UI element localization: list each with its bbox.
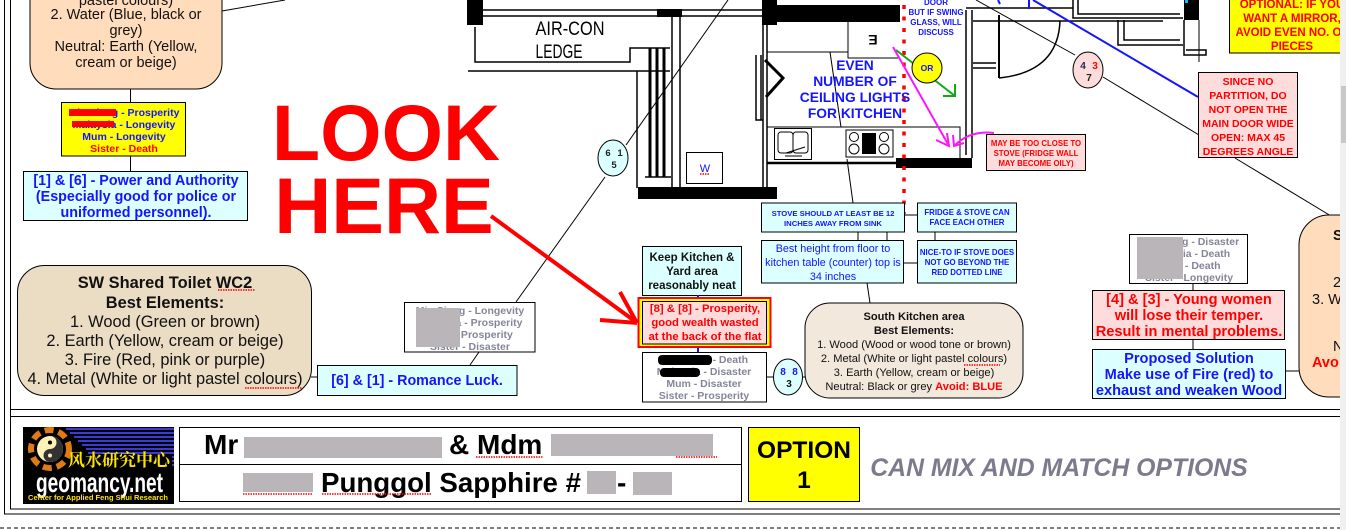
panel: best height: Best height from floor to [776,243,890,255]
panel: family yellow box [62,102,186,156]
title: client names: & Mdm [449,429,542,460]
panel: power and authority: (Especially good for police or [36,189,237,205]
title: client names: - [617,467,626,498]
panel: family gray box left: Malaysia - Prosperity [417,317,523,329]
panel: romance luck: [6] & [1] - Romance Luck. [331,373,503,389]
panel: right peach elements: S [1333,228,1343,244]
main door and right walls [966,0,1206,158]
panel: family gray box left: Min Siang - Longevity [416,305,524,317]
panel: best height [762,240,904,283]
callout: optional mirror: PIECES [1271,41,1313,53]
panel: nice-to: NICE-TO IF STOVE DOES [920,248,1014,257]
washing machine box [686,152,722,184]
panel: stove distance [762,203,904,232]
panel: right peach elements: N [1333,339,1343,355]
panel: proposed solution [1092,350,1286,399]
callout: optional mirror: AVOID EVEN NO. OF [1236,27,1346,39]
panel: right peach elements: 3. W [1312,292,1342,308]
callout: since no partition: OPEN: MAX 45 [1211,132,1285,144]
text: door swing note: GLASS, WILL [910,18,962,27]
panel: keep kitchen neat: Keep Kitchen & [650,252,734,264]
panel: young women warning: [4] & [3] - Young women [1106,292,1272,308]
circle: stars 4 3 7: 4 [1080,61,1086,72]
panel: young women warning: Result in mental problems. [1096,324,1282,340]
panel: stove distance: INCHES AWAY FROM SINK [784,219,882,228]
panel: family gray box right: Sister - Longevity [1145,272,1233,284]
icon: bagua [31,430,69,468]
panel: top peach elements: Neutral: Earth (Yellow, [55,39,197,55]
text: even number of ceiling lights: EVEN [836,58,874,73]
panel: right peach elements [1299,215,1346,397]
panel: power and authority: [1] & [6] - Power and Authority [33,173,239,189]
scrollbar [1340,0,1346,530]
panel: south kitchen area: Best Elements: [874,325,954,337]
fridge label: E [868,32,878,48]
panel: romance luck [318,366,517,396]
callout: since no partition: NOT OPEN THE [1209,104,1287,116]
panel: sw shared toilet: 4. Metal (White or light pastel colours) [27,370,303,388]
callout: since no partition [1198,72,1298,158]
panel: south kitchen area: 2. Metal (White or light pastel colours) [821,353,1007,365]
circle: stars 6 1 5: 6 [605,148,611,159]
panel: power and authority: uniformed personnel). [61,205,211,221]
panel: right peach elements: Avo [1312,355,1339,371]
callout: since no partition: MAIN DOOR WIDE [1202,118,1294,130]
panel: top peach elements: cream or beige) [75,55,177,71]
panel: family gray box left: Sister - Disaster [430,341,510,353]
callout: may be too close: MAY BE TOO CLOSE TO [991,139,1081,148]
panel: nice-to [918,240,1016,283]
panel: sw shared toilet: 2. Earth (Yellow, cream or beige) [46,332,284,350]
logo: geomancy.net [23,427,174,504]
callout: since no partition: SINCE NO [1223,76,1273,88]
panel: fridge and stove: FRIDGE & STOVE CAN [924,208,1010,217]
callout: since no partition: DEGREES ANGLE [1203,146,1293,158]
panel: young women warning [1092,290,1284,340]
logo: geomancy.net: geomancy.net [36,467,163,498]
panel: family gray box right: Min Siang - Disaster [1139,236,1239,248]
panel: top peach elements: 2. Water (Blue, black or [51,7,202,23]
panel: south kitchen area: Neutral: Black or grey Avoid: BLUE [825,381,1003,393]
panel: south kitchen area [805,303,1023,398]
kitchen walls [756,0,972,187]
title: client names: Punggol Sapphire # [321,467,581,498]
icon: or circle: OR [921,63,933,73]
text: even number of ceiling lights: CEILING LIGHTS [800,90,910,105]
panel: proposed solution: Proposed Solution [1124,351,1254,367]
panel: prosperity highlighted [638,298,770,347]
panel: family gray box centre: Min Siang - Death [660,354,748,366]
floor plan [222,0,1331,365]
callout: since no partition: PARTITION, DO [1209,90,1287,102]
panel: prosperity highlighted: at the back of the flat [648,331,762,343]
panel: sw shared toilet: Best Elements: [106,294,224,312]
panel: keep kitchen neat: Yard area [666,266,718,278]
circle: stars 4 3 7: 3 [1092,61,1098,72]
red dotted line [902,5,906,214]
label: air-con ledge [536,19,604,63]
panel: family gray box centre: Malaysia - Disaster [657,366,751,378]
panel: family yellow box: Min Siang - Prosperity [69,107,180,119]
panel: family gray box left [404,302,535,353]
panel: sw shared toilet: 1. Wood (Green or brown) [70,313,260,331]
panel: nice-to: RED DOTTED LINE [931,268,1003,277]
circle: stars 4 3 7 [1073,52,1103,88]
panel: nice-to: NOT GO BEYOND THE [925,258,1009,267]
panel: family gray box left: Mum - Prosperity [427,329,513,341]
panel: keep kitchen neat [642,246,742,296]
panel: proposed solution: exhaust and weaken Wood [1096,383,1282,399]
title: client names: Mr [204,429,238,460]
text: door swing note: BUT IF SWING [908,8,964,17]
arrow: magenta curved [953,133,994,146]
panel: family yellow box: Malaysia - Longevity [73,119,176,131]
panel: south kitchen area: 1. Wood (Wood or wood tone or brown) [817,339,1011,351]
panel: sw shared toilet: 3. Fire (Red, pink or purple) [65,351,265,369]
panel: stove distance: STOVE SHOULD AT LEAST BE 12 [772,209,894,218]
panel: keep kitchen neat: reasonably neat [648,280,736,292]
callout: optional mirror: WANT A MIRROR, [1243,13,1341,25]
panel: fridge and stove: FACE EACH OTHER [930,218,1005,227]
circle: stars 6 1 5 [598,140,628,176]
circle: stars 4 3 7: 7 [1086,73,1092,84]
air-con ledge walls [467,0,777,199]
badge: option 1: 1 [797,467,811,494]
panel: proposed solution: Make use of Fire (red) to [1105,367,1273,383]
callout: may be too close: STOVE (FRIDGE WALL [994,149,1079,158]
logo: geomancy.net: 风水研究中心 [68,446,172,471]
panel: best height: 34 inches [810,271,857,283]
panel: family gray box centre: Mum - Disaster [666,378,742,390]
panel: best height: kitchen table (counter) top is [765,257,901,269]
panel: sw shared toilet [18,266,312,396]
stove [846,130,893,157]
panel: top peach elements [30,0,222,89]
panel: fridge and stove [918,203,1016,232]
panel: south kitchen area: South Kitchen area [863,311,965,323]
panel: prosperity highlighted: [8] & [8] - Prosperity, [650,303,760,315]
label: air-con ledge: LEDGE [536,42,582,63]
callout: optional mirror [1230,0,1346,53]
heading: look here: HERE [274,161,494,250]
badge: option 1: OPTION [757,437,851,464]
panel: family yellow box: Sister - Death [90,143,158,155]
panel: power and authority [24,172,248,221]
arrow: red pointer [491,216,637,323]
arrow: magenta straight [893,47,949,146]
circle: stars 8 8 3 [774,359,802,395]
sink [774,128,812,160]
panel: prosperity highlighted: good wealth wasted [651,317,759,329]
heading: look here: LOOK [272,88,500,177]
text: door swing note [908,0,964,37]
washing machine box: W [700,163,711,175]
panel: sw shared toilet: SW Shared Toilet WC2 [78,274,252,292]
heading: look here [272,88,500,250]
panel: right peach elements: 2 [1333,275,1341,291]
panel: south kitchen area: 3. Earth (Yellow, cream or beige) [834,367,994,379]
panel: family gray box right [1130,234,1248,284]
callout: may be too close: MAY BECOME OILY) [998,159,1074,168]
circle: stars 8 8 3: 3 [786,379,792,390]
callout: may be too close [986,134,1086,170]
panel: top peach elements: grey) [109,23,143,39]
circle: stars 6 1 5: 1 [617,148,623,159]
label: air-con ledge: AIR-CON [536,19,604,40]
panel: family gray box centre: Sister - Prosperity [659,390,749,402]
title: client names [180,428,742,502]
note: can mix and match: CAN MIX AND MATCH OPTIONS [870,455,1248,482]
text: even number of ceiling lights: NUMBER OF [813,74,897,89]
arrow: green [896,50,955,96]
text: door swing note: DISCUSS [918,28,954,37]
badge: option 1 [748,428,860,502]
circle: stars 6 1 5: 5 [611,160,617,171]
circle: stars 8 8 3: 8 [780,367,786,378]
panel: family gray box right: Mum - Death [1158,260,1220,272]
icon: or circle [912,53,942,83]
text: even number of ceiling lights: FOR KITCHEN [808,106,902,121]
logo: geomancy.net: Center for Applied Feng Shui Research [28,493,168,502]
panel: family gray box right: Malaysia - Death [1148,248,1230,260]
circle: stars 8 8 3: 8 [792,367,798,378]
panel: family yellow box: Mum - Longevity [82,131,166,143]
panel: family gray box centre [642,352,766,402]
panel: young women warning: will lose their temper. [1114,308,1263,324]
text: even number of ceiling lights [800,58,910,121]
